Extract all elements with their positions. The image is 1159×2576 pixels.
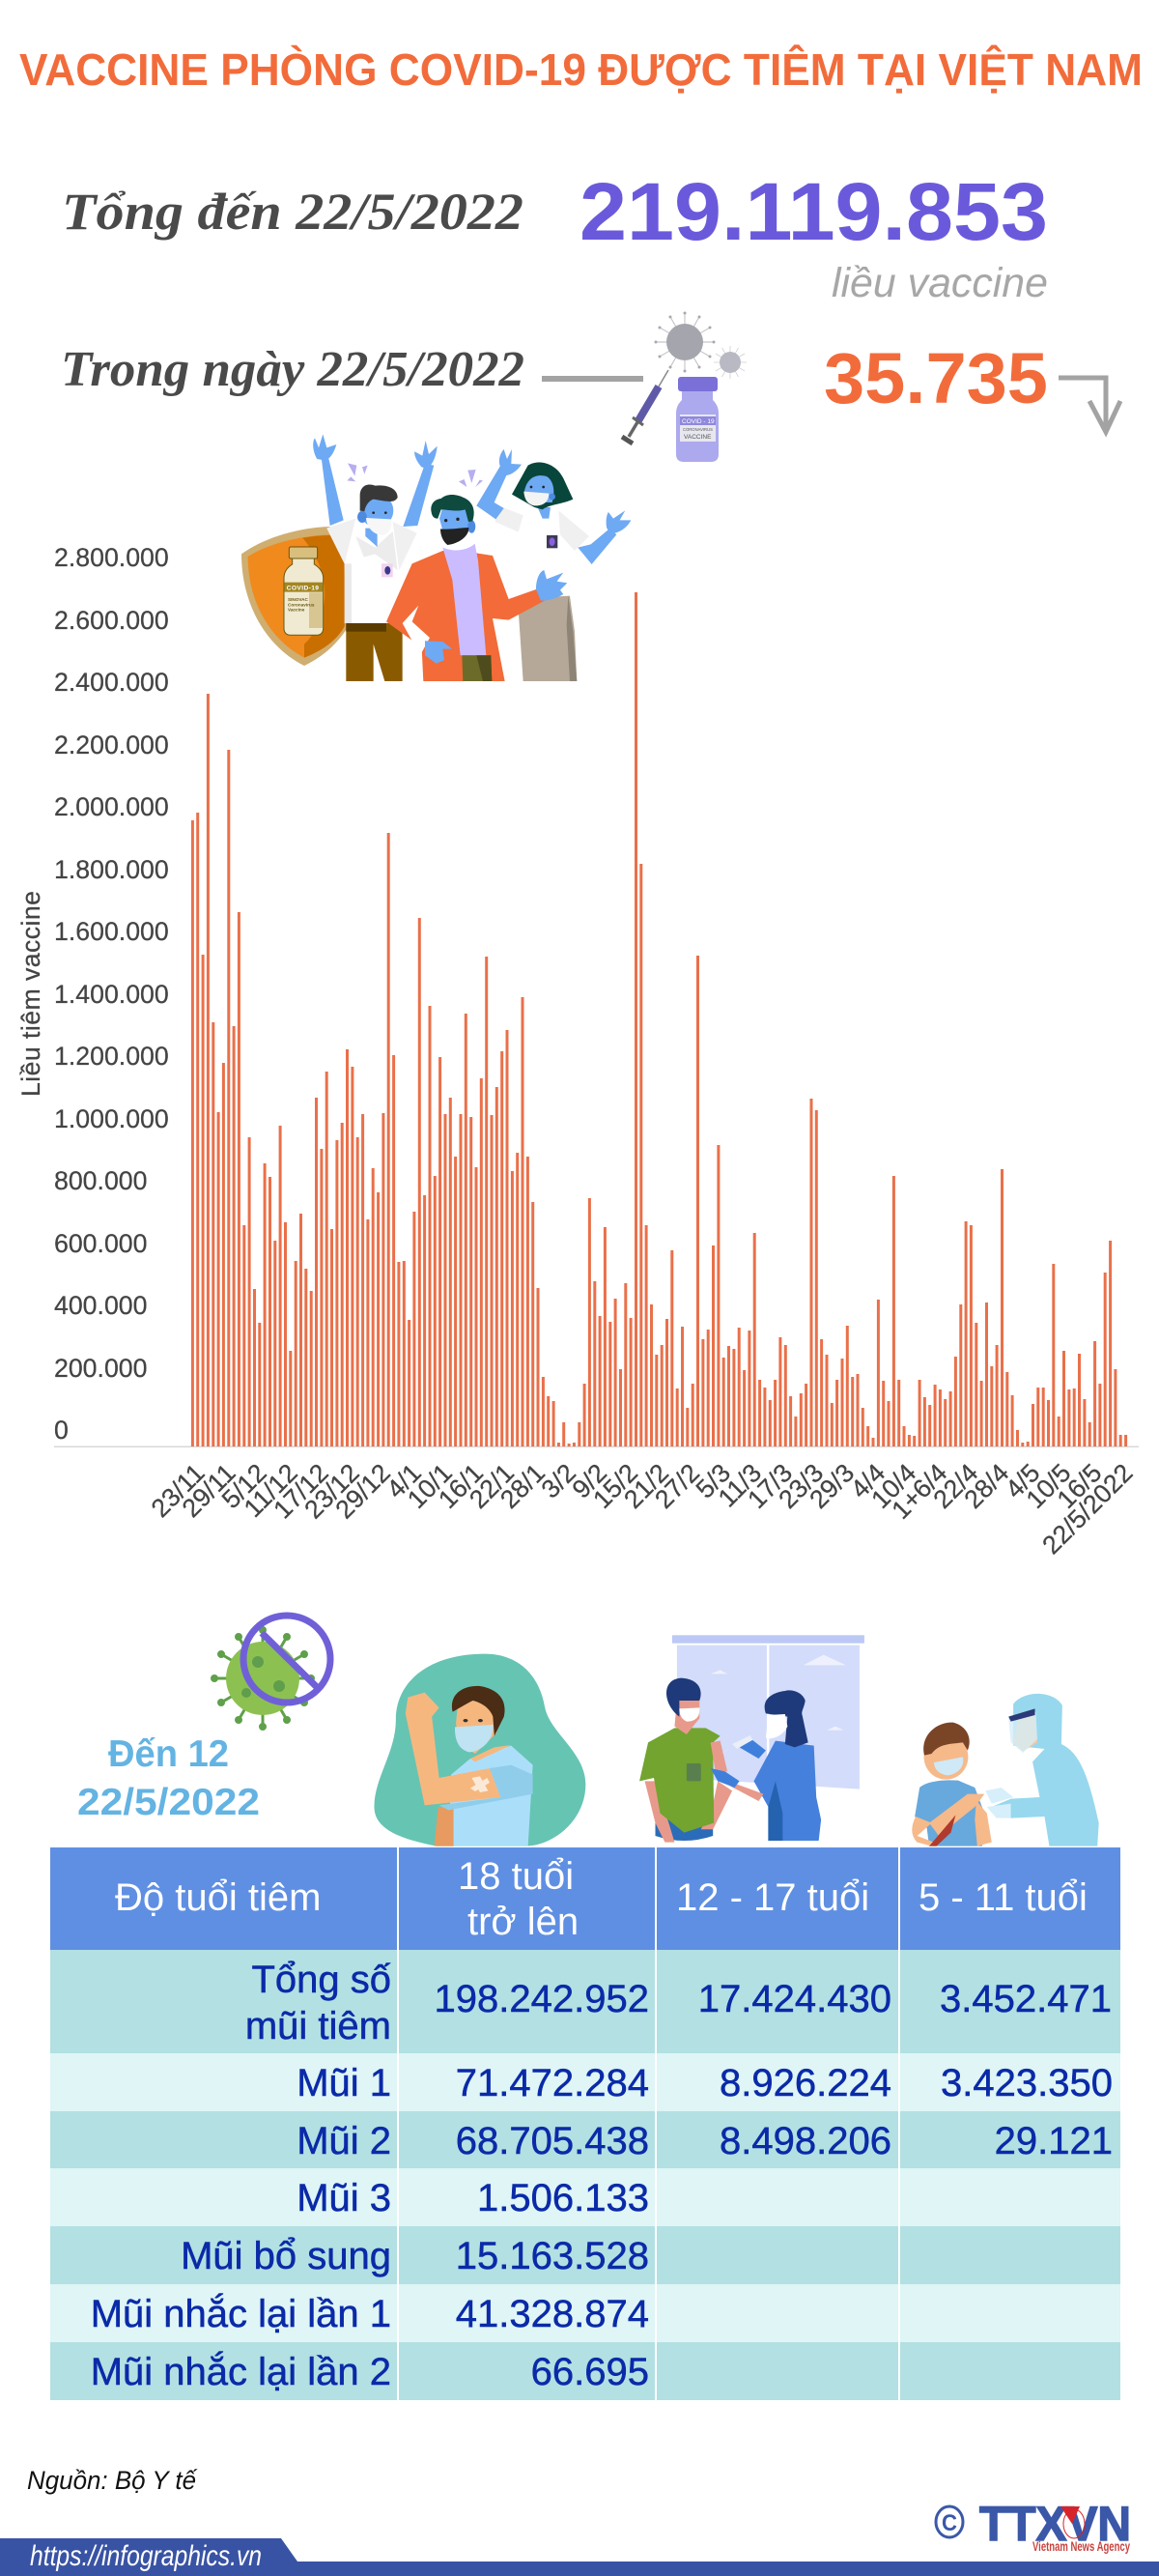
x axis date labels: 28/1 [495,1458,551,1514]
y axis labels: 1.600.000 [54,917,169,946]
man with raised arms [313,434,438,681]
x axis date labels: 23/11 [146,1458,211,1523]
x axis date labels: 22/4 [927,1458,983,1514]
y axis labels [54,543,169,1445]
y axis labels: 1.800.000 [54,855,169,884]
footer bar [0,2538,1159,2576]
icon: vial [676,377,719,462]
y axis labels: 1.200.000 [54,1042,169,1071]
x axis date labels: 16/1 [433,1458,489,1514]
x axis date labels: 17/12 [268,1458,334,1524]
y axis labels: 800.000 [54,1166,147,1195]
row: dose 1: 8.926.224 [720,2062,891,2104]
illustration: teen being vaccinated [639,1678,732,1843]
y axis labels: 400.000 [54,1291,147,1320]
connector line [542,376,643,382]
bars [192,592,1126,1446]
y axis labels: 1.000.000 [54,1104,169,1133]
y axis title: Liều tiêm vaccine [16,891,45,1097]
illustration: adult with bandage [374,1654,585,1846]
doses unit: liều vaccine [832,260,1048,306]
illustration: window [672,1635,864,1789]
row: total doses: 17.424.430 [698,1978,891,2020]
icon: vial: COVID - 19 [682,418,715,425]
y axis labels: 600.000 [54,1229,147,1258]
x axis date labels: 27/2 [649,1458,705,1514]
vial on shield: COVID-19 [287,586,319,592]
vial on shield: SINOVAC [288,597,309,602]
icon: large virus [656,313,714,371]
row: dose 1: 71.472.284 [456,2062,649,2104]
x axis date labels: 17/3 [742,1458,798,1514]
daily doses label: Trong ngày 22/5/2022 [61,342,524,397]
logo: TTXVN: TTXVN [979,2497,1131,2551]
bar chart: daily vaccine doses [16,543,1139,1560]
y axis labels: 2.400.000 [54,668,169,697]
x axis date labels: 4/5 [1000,1458,1045,1503]
x axis date labels: 9/2 [567,1458,612,1503]
row: dose 2: 68.705.438 [456,2120,649,2162]
logo: TTXVN: C [942,2510,957,2536]
row: dose 1: 3.423.350 [941,2062,1113,2104]
row: dose 2: 8.498.206 [720,2120,891,2162]
row backgrounds [50,1847,1120,2400]
row: dose 2 [297,2120,1113,2162]
man in orange coat [386,495,567,681]
x axis date labels: 22/1 [464,1458,520,1514]
title: VACCINE PHÒNG COVID-19 ĐƯỢC TIÊM TẠI VIỆT NAM [19,44,1143,95]
woman with mask [476,449,631,681]
illustration: nurse [711,1690,821,1841]
y axis labels: 200.000 [54,1354,147,1383]
table header: 12 - 17 tuổi [676,1876,869,1919]
row: dose 2: 29.121 [995,2120,1113,2162]
table header: 5 - 11 tuổi [919,1876,1088,1919]
x axis date labels: 21/2 [618,1458,674,1514]
vial on shield: Coronavirus [288,602,315,607]
table header [50,1847,1120,1950]
table header: trở lên [467,1901,579,1943]
table header: 18 tuổi [458,1855,574,1898]
baseline [54,1445,1139,1447]
y axis labels: 0 [54,1416,69,1445]
footer bar: https://infographics.vn [30,2540,262,2572]
icon: small virus [714,346,747,379]
vial on shield [284,547,324,635]
y axis labels: 2.200.000 [54,730,169,759]
row: dose 1: Mũi 1 [297,2062,391,2104]
row: booster 2: Mũi nhắc lại lần 2 [91,2350,391,2393]
illustration: medic in protective suit [985,1694,1099,1846]
illustration: people with vaccine shield [241,434,631,681]
row: total doses: 3.452.471 [940,1978,1112,2020]
row: dose 3: Mũi 3 [297,2177,391,2219]
x axis date labels: 15/2 [587,1458,643,1514]
x axis date labels: 5/12 [216,1458,272,1514]
icon: crossed-out virus [214,1616,330,1727]
vial on shield: Vaccine [288,608,305,613]
row: additional dose: Mũi bổ sung [181,2235,391,2277]
row: total doses: mũi tiêm [245,2005,391,2047]
shield [241,527,349,666]
row: total doses [245,1959,1112,2047]
heading: date: 22/5/2022 [77,1782,260,1823]
x axis date labels: 1+6/4 [886,1458,952,1525]
x axis date labels: 16/5 [1051,1458,1107,1514]
icon: vial: CORONAVIRUS [683,427,713,432]
x axis date labels [146,1458,1138,1560]
total doses number: 219.119.853 [580,166,1048,257]
table: doses by age group [50,1847,1120,2400]
y axis labels: 1.400.000 [54,980,169,1009]
x axis date labels: 11/3 [713,1458,767,1513]
row: additional dose: 15.163.528 [456,2235,649,2277]
row: additional dose [181,2235,649,2277]
x axis date labels: 10/4 [865,1458,921,1514]
x axis date labels: 29/11 [177,1458,241,1523]
x axis date labels: 22/5/2022 [1036,1458,1138,1560]
daily doses number: 35.735 [824,338,1048,418]
y axis labels: 2.000.000 [54,792,169,821]
row: total doses: Tổng số [251,1959,391,2001]
x axis date labels: 23/3 [773,1458,829,1514]
x axis date labels: 23/12 [298,1458,365,1524]
x axis date labels: 28/4 [958,1458,1014,1514]
row: dose 2: Mũi 2 [297,2120,391,2162]
x axis date labels: 10/5 [1020,1458,1076,1514]
heading: date: Đến 12 [108,1733,229,1775]
table header: Độ tuổi tiêm [115,1876,321,1919]
icon: syringe, vial and viruses [622,313,747,462]
row: booster 1 [91,2292,649,2335]
row: booster 1: Mũi nhắc lại lần 1 [91,2292,391,2335]
illustrations: age groups [374,1635,1099,1846]
row: dose 3: 1.506.133 [477,2177,649,2219]
x axis date labels: 3/2 [535,1458,581,1503]
x axis date labels: 4/4 [845,1458,890,1503]
x axis date labels: 29/12 [329,1458,396,1524]
total doses label: Tổng đến 22/5/2022 [62,183,523,241]
row: booster 2: 66.695 [531,2351,649,2393]
x axis date labels: 4/1 [381,1458,427,1503]
y axis labels: 2.800.000 [54,543,169,572]
source note: Nguồn: Bộ Y tế [27,2466,198,2495]
x axis date labels: 11/12 [239,1458,303,1523]
x axis date labels: 10/1 [402,1458,458,1514]
row: total doses: 198.242.952 [435,1978,649,2020]
row: dose 3 [297,2177,649,2219]
icon: vial: VACCINE [684,434,712,441]
icon: syringe [622,370,668,444]
x axis date labels: 5/3 [691,1458,736,1503]
row: booster 2 [91,2350,649,2393]
illustration: child [912,1723,992,1846]
x axis date labels: 29/3 [804,1458,860,1514]
row: booster 1: 41.328.874 [456,2293,649,2335]
row: dose 1 [297,2062,1113,2104]
arrow: decrease [1059,378,1120,432]
heading: date [77,1733,260,1823]
marks above heads [347,463,483,487]
y axis labels: 2.600.000 [54,606,169,635]
